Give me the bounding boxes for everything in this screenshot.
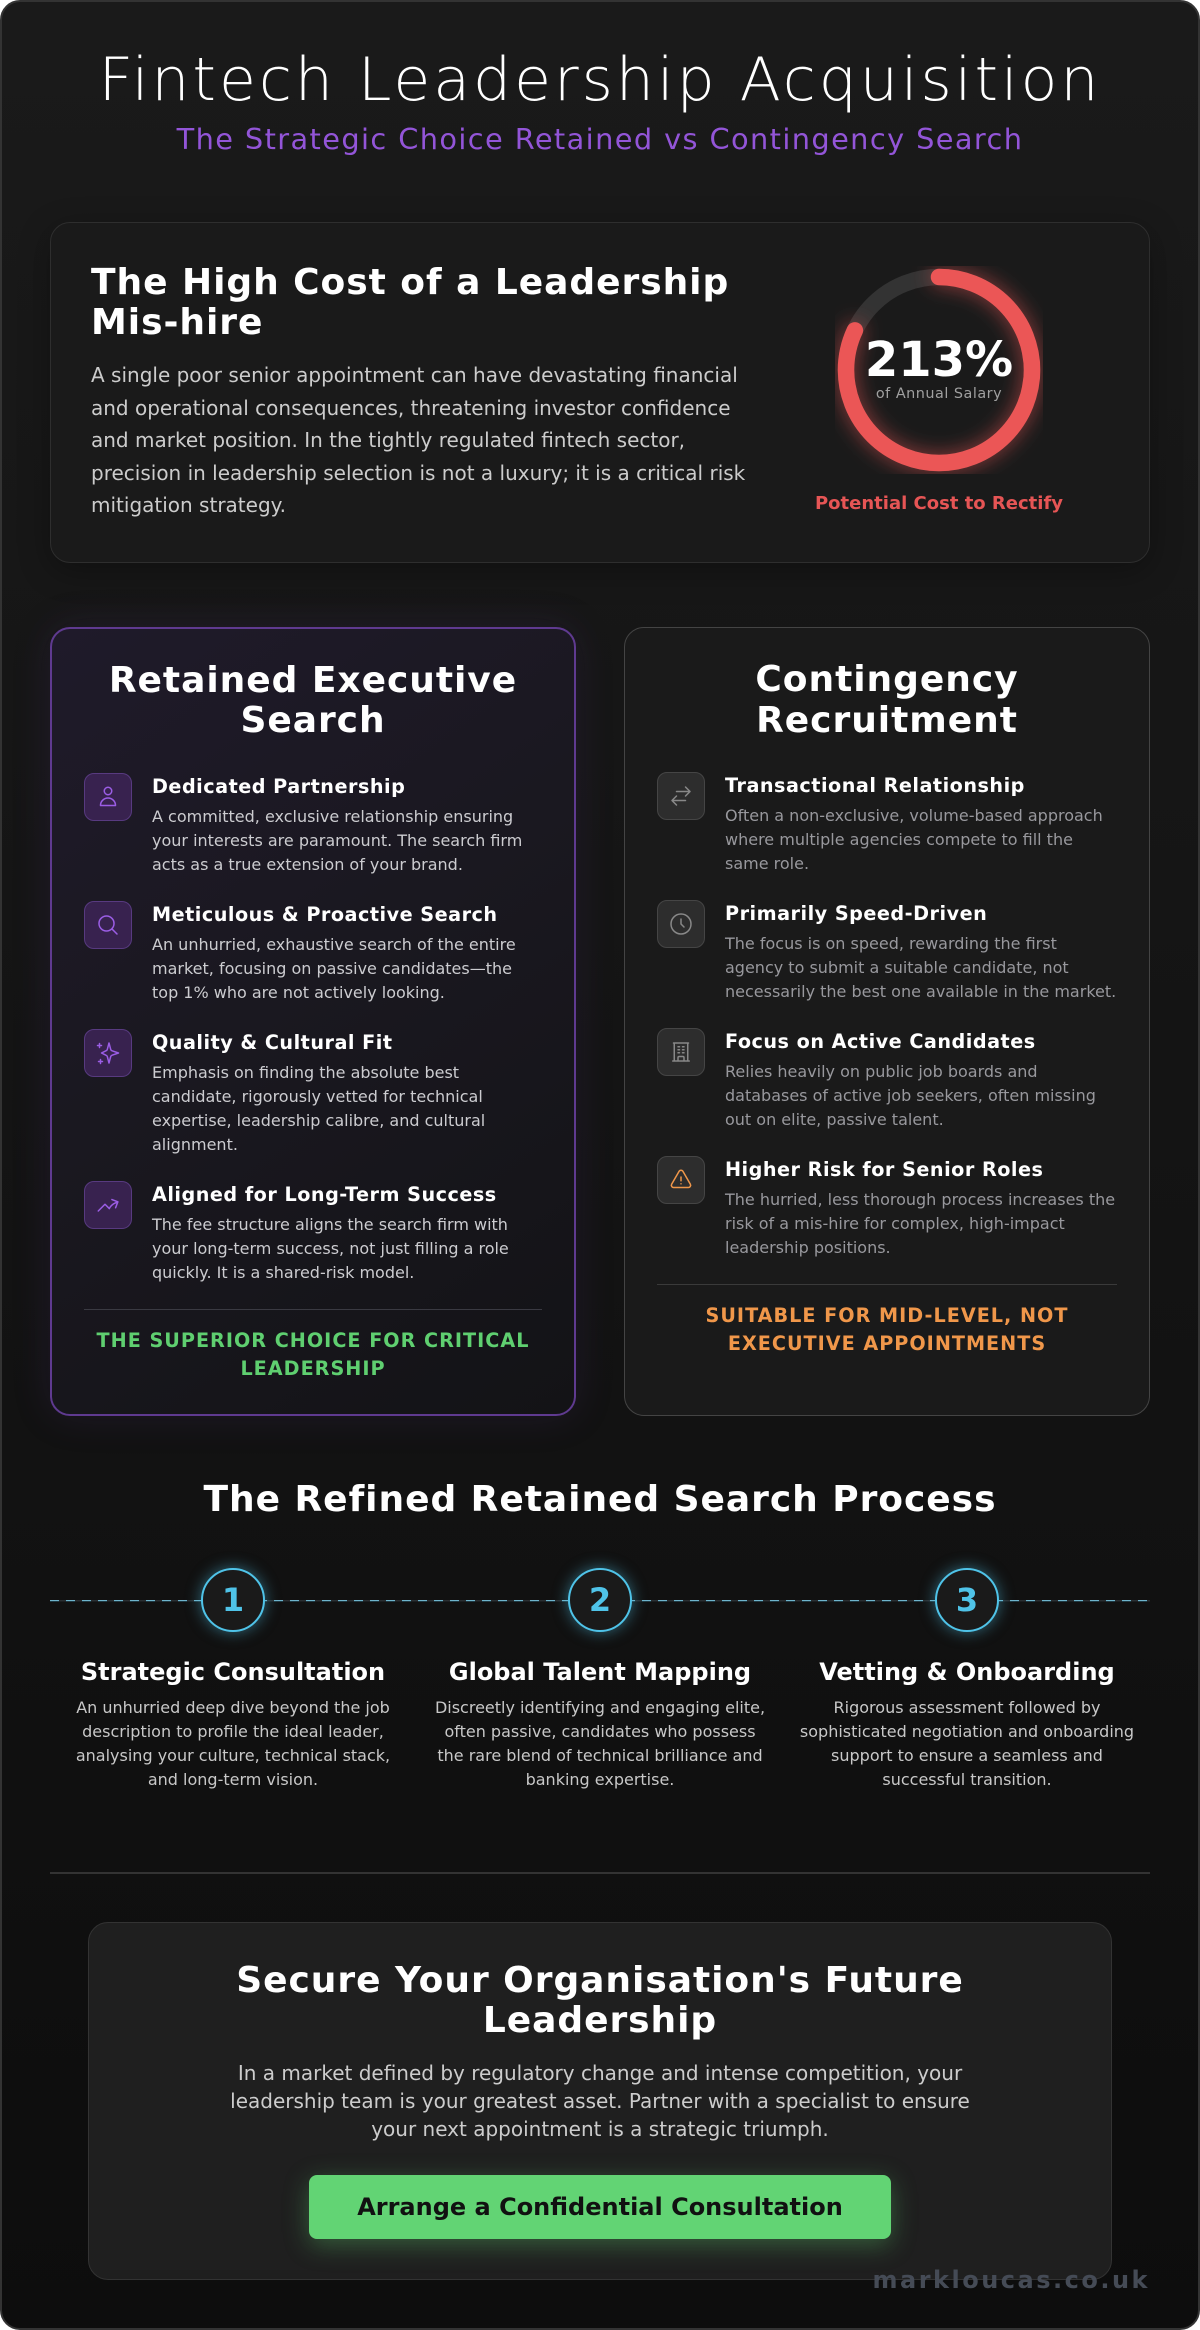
step 1 title: Strategic Consultation [81, 1658, 385, 1686]
step 3 number: 3 [956, 1581, 978, 1619]
item text: databases of active job seekers, often missing [725, 1086, 1096, 1105]
verdict: retained: LEADERSHIP [240, 1357, 386, 1380]
item title: Higher Risk for Senior Roles [725, 1158, 1043, 1181]
item text: market, focusing on passive candidates—the [152, 959, 512, 978]
step 3 text: Rigorous assessment followed by [834, 1698, 1100, 1717]
icon: trending up [84, 1181, 132, 1229]
item text: A committed, exclusive relationship ensuring [152, 807, 513, 826]
icon: sparkles [84, 1029, 132, 1077]
item title: Aligned for Long-Term Success [152, 1183, 497, 1206]
heading: high cost [91, 262, 729, 343]
panel: call to action [88, 1922, 1112, 2280]
item text [725, 806, 1103, 873]
item text: acts as a true extension of your brand. [152, 855, 463, 874]
step 2 text [435, 1698, 765, 1789]
text: call to action [230, 2061, 970, 2141]
step 2 text: the rare blend of technical brilliance and [437, 1746, 763, 1765]
divider [50, 1872, 1150, 1874]
step 1 text: An unhurried deep dive beyond the job [76, 1698, 390, 1717]
text: high cost paragraph: mitigation strategy. [91, 493, 286, 517]
item text: An unhurried, exhaustive search of the entire [152, 935, 516, 954]
text: high cost paragraph: and market position. In the tightly regulated fintech sector, [91, 428, 685, 452]
item text: your interests are paramount. The search firm [152, 831, 522, 850]
panel: contingency recruitment [624, 627, 1150, 1416]
heading: call to action: Leadership [483, 2000, 717, 2041]
text: high cost paragraph: A single poor senior appointment can have devastating financial [91, 363, 738, 387]
panel: high cost of a mis-hire [50, 222, 1150, 563]
item text: where multiple agencies compete to fill the [725, 830, 1073, 849]
verdict: contingency: EXECUTIVE APPOINTMENTS [728, 1332, 1046, 1355]
item text: quickly. It is a shared-risk model. [152, 1263, 414, 1282]
title: Fintech Leadership Acquisition [99, 45, 1101, 115]
heading: contingency: Contingency [755, 659, 1019, 700]
gauge label: Potential Cost to Rectify [815, 493, 1063, 514]
icon: arrows [657, 772, 705, 820]
heading: retained [109, 660, 517, 741]
heading: contingency [755, 659, 1019, 741]
divider [657, 1284, 1117, 1285]
step 1 number [201, 1568, 265, 1632]
step 3 number [935, 1568, 999, 1632]
item text: same role. [725, 854, 809, 873]
verdict: retained [96, 1329, 529, 1380]
step 3 title: Vetting & Onboarding [819, 1658, 1115, 1686]
item text: Emphasis on finding the absolute best [152, 1063, 459, 1082]
step 2 text: banking expertise. [526, 1770, 674, 1789]
item text: agency to submit a suitable candidate, not [725, 958, 1069, 977]
item text: The focus is on speed, rewarding the first [725, 934, 1057, 953]
icon: search [84, 901, 132, 949]
item text [152, 1215, 509, 1282]
item text: leadership positions. [725, 1238, 891, 1257]
item text: candidate, rigorously vetted for technical [152, 1087, 483, 1106]
item title: Primarily Speed-Driven [725, 902, 987, 925]
divider [84, 1309, 542, 1310]
item text: expertise, leadership calibre, and cultural [152, 1111, 485, 1130]
item text: alignment. [152, 1135, 238, 1154]
heading: retained: Retained Executive [109, 660, 517, 701]
item text: Often a non-exclusive, volume-based approach [725, 806, 1103, 825]
gauge caption: of Annual Salary [876, 386, 1002, 402]
text: high cost paragraph: precision in leadership selection is not a luxury; it is a critical risk [91, 460, 745, 484]
item text: your long-term success, not just filling a role [152, 1239, 509, 1258]
step 2 number [568, 1568, 632, 1632]
item text [152, 807, 522, 874]
text: high cost paragraph [91, 363, 745, 517]
heading: retained: Search [240, 700, 386, 741]
button [309, 2175, 891, 2239]
heading: high cost: The High Cost of a Leadership [91, 262, 729, 303]
watermark: markloucas.co.uk [872, 2266, 1150, 2294]
item text [152, 1063, 485, 1154]
button: Arrange a Confidential Consultation [357, 2193, 843, 2221]
step 1 text: description to profile the ideal leader, [82, 1722, 384, 1741]
step 2 number: 2 [589, 1581, 611, 1619]
text: call to action: leadership team is your greatest asset. Partner with a specialist to ensure [230, 2089, 970, 2113]
item text: Relies heavily on public job boards and [725, 1062, 1038, 1081]
chart: 213% gauge [835, 266, 1043, 474]
item text: The fee structure aligns the search firm with [152, 1215, 508, 1234]
verdict: contingency: SUITABLE FOR MID-LEVEL, NOT [706, 1304, 1068, 1327]
step 2 title: Global Talent Mapping [449, 1658, 751, 1686]
step 1 number: 1 [222, 1581, 244, 1619]
gauge value: 213% [865, 332, 1013, 388]
step 2 text: often passive, candidates who possess [444, 1722, 756, 1741]
heading: contingency: Recruitment [756, 700, 1018, 741]
item text: out on elite, passive talent. [725, 1110, 944, 1129]
item title: Transactional Relationship [725, 774, 1025, 797]
step 1 text [76, 1698, 390, 1789]
subtitle: The Strategic Choice Retained vs Contingency Search [177, 122, 1023, 156]
step 3 text: sophisticated negotiation and onboarding [800, 1722, 1134, 1741]
text: call to action: your next appointment is a strategic triumph. [371, 2117, 829, 2141]
item text: The hurried, less thorough process increases the [725, 1190, 1115, 1209]
verdict: contingency [706, 1304, 1068, 1355]
heading: process: The Refined Retained Search Process [204, 1479, 996, 1520]
heading: high cost: Mis-hire [91, 302, 263, 343]
verdict: retained: THE SUPERIOR CHOICE FOR CRITICAL [97, 1329, 529, 1352]
item text: risk of a mis-hire for complex, high-impact [725, 1214, 1065, 1233]
step 3 text: support to ensure a seamless and [831, 1746, 1103, 1765]
item title: Focus on Active Candidates [725, 1030, 1036, 1053]
text: call to action: In a market defined by regulatory change and intense competition, your [238, 2061, 962, 2085]
item text: top 1% who are not actively looking. [152, 983, 445, 1002]
item title: Quality & Cultural Fit [152, 1031, 393, 1054]
panel: retained executive search [50, 627, 576, 1416]
item title: Dedicated Partnership [152, 775, 405, 798]
heading: call to action: Secure Your Organisation's Future [236, 1960, 964, 2001]
timeline dashed line [50, 1600, 1150, 1602]
item text [725, 1062, 1096, 1129]
icon: person [84, 773, 132, 821]
step 2 text: Discreetly identifying and engaging elite, [435, 1698, 765, 1717]
icon: building [657, 1028, 705, 1076]
heading: call to action [236, 1960, 964, 2041]
item text [724, 1190, 1115, 1257]
item title: Meticulous & Proactive Search [152, 903, 498, 926]
item text [724, 934, 1116, 1001]
step 3 text [800, 1698, 1134, 1789]
text: high cost paragraph: and operational consequences, threatening investor confidence [91, 396, 731, 420]
item text [152, 935, 516, 1002]
step 3 text: successful transition. [882, 1770, 1052, 1789]
icon: clock [657, 900, 705, 948]
icon: warning [657, 1156, 705, 1204]
step 1 text: and long-term vision. [148, 1770, 318, 1789]
item text: necessarily the best one available in the market. [725, 982, 1116, 1001]
step 1 text: analysing your culture, technical stack, [76, 1746, 390, 1765]
